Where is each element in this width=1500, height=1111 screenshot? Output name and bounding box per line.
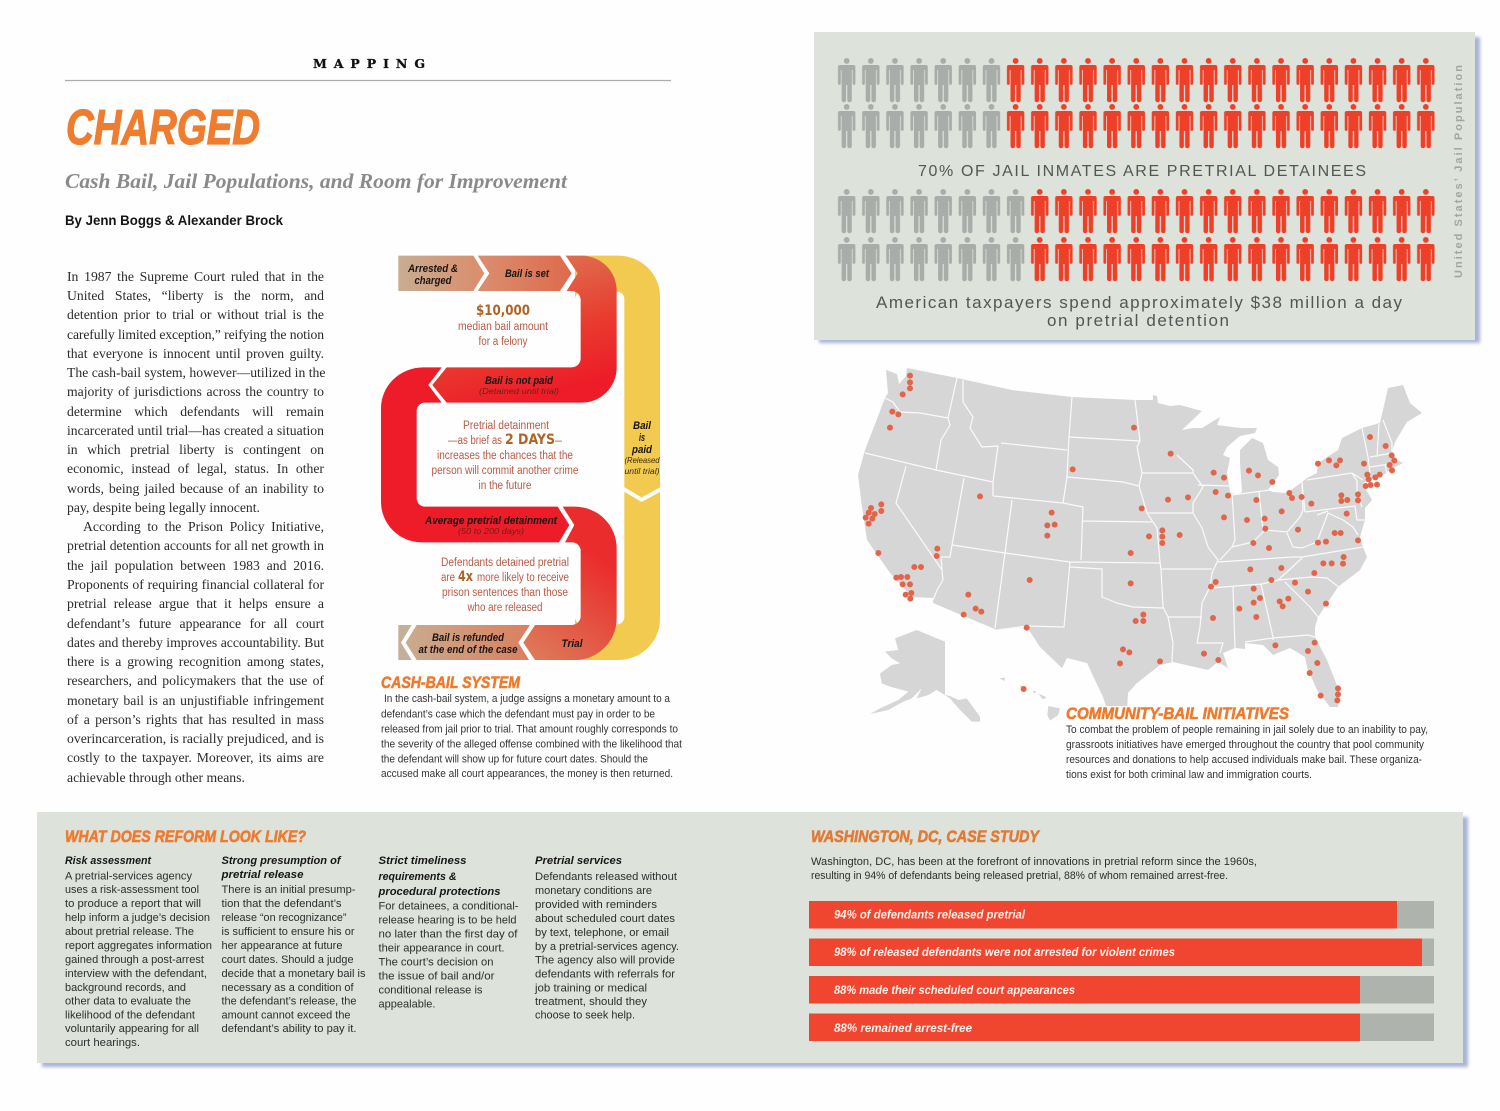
flow label: bail set: Bail is set [505,268,550,280]
body article text: carefully limited exception,” reifying the notion [67,327,324,342]
column: strict timeliness: conditional release is [378,984,483,996]
column: pretrial services [534,855,679,1022]
flow label: bail paid [624,420,660,476]
column: pretrial services: by a pretrial-services agency. [535,941,679,953]
flow label: average detainment: Average pretrial detainment [424,515,558,527]
flow diagram: cash-bail system: 4x [458,569,473,585]
stat: 2 days: Pretrial detainment [463,420,550,432]
initiative dots west [866,376,1160,689]
body article text: economic, instead of legal, status. In other [67,461,324,476]
column: pretrial services: choose to seek help. [535,1010,635,1022]
column: strict timeliness: their appearance in court. [378,942,504,954]
flow diagram: cash-bail system: are [441,572,455,584]
pictogram: row 2 [835,104,1438,150]
community-bail description: tions exist for both criminal law and immigration courts. [1066,769,1312,781]
flow label: arrested: Arrested & [407,263,458,275]
byline: By Jenn Boggs & Alexander Brock [65,212,283,228]
column: pretrial services: treatment, should they [535,996,648,1008]
panel: reform and case study [37,812,1468,1067]
flow diagram: cash-bail system: for a felony [478,336,528,348]
column: risk assessment: interview with the defendant, [65,968,207,980]
column: strong presumption: defendant’s ability to pay it. [222,1023,356,1035]
column: pretrial services: monetary conditions are [535,885,652,897]
column: risk assessment: uses a risk-assessment tool [65,884,199,896]
column: strict timeliness: The court’s decision on [378,956,494,968]
body article text: pretrial detention accounts for all net growth in [67,538,324,553]
body article text: words, being jailed because of an inability to [67,481,324,496]
case study intro: resulting in 94% of defendants being released pretrial, 88% of whom remained arrest-free. [811,870,1228,882]
pictogram: row 4 [835,237,1438,283]
column: risk assessment: to produce a report that will [65,898,201,910]
body article text: The cash-bail system, however—utilized in the [67,365,325,380]
cash-bail description: defendant’s case which the defendant must pay in order to be [381,708,655,720]
column: risk assessment: report aggregates information [65,940,212,952]
body article text: determine which defendants will remain [67,404,324,419]
column: pretrial services: Defendants released without [535,871,677,883]
body article text: According to the Prison Policy Initiative, [83,519,324,534]
Alaska [870,630,980,722]
body article text: there is a growing recognition among states, [67,654,324,669]
pictogram: row 3 [835,189,1438,235]
stat heading: 70%: 70% OF JAIL INMATES ARE PRETRIAL DETAINEES [918,163,1366,180]
stat: $10,000: $10,000 [476,303,530,319]
body article text: In 1987 the Supreme Court ruled that in the [67,269,324,284]
cash-bail description: the defendant will show up for future court dates. Should the [381,754,648,766]
bar: 98% [809,938,1434,966]
case study intro [811,856,1257,882]
stat: 4x: Defendants detained pretrial [441,557,569,569]
flow diagram: cash-bail system: (Detained until trial) [479,386,559,396]
flow diagram: cash-bail system: 2 DAYS [505,432,555,448]
body article text: detention prior to trial or without trial is the [67,307,324,322]
column: strict timeliness [377,855,519,1010]
bar: 88% appearances: 88% made their scheduled court appearances [834,985,1075,997]
mainland US [858,368,1422,712]
column: strong presumption: pretrial release [220,869,304,881]
initiative dots east [1162,437,1394,700]
column: strong presumption [220,855,366,1035]
column: strict timeliness: procedural protections [377,886,500,898]
subtitle: Cash Bail, Jail Populations, and Room for Improvement [65,169,568,193]
bar: 88% arrest-free [809,1014,1434,1041]
flow label: refund: Bail is refunded [432,632,504,644]
body article text: incarcerated until trial—has created a situation [67,423,324,438]
heading: case study: WASHINGTON, DC, CASE STUDY [811,827,1040,846]
column: risk assessment: about pretrial release. The [65,926,194,938]
body article text: United States, “liberty is the norm, and [67,288,324,303]
body article text: defendant’s future appearance for all court [67,616,324,631]
flow label: bail paid: Bail [633,420,652,432]
column: strict timeliness: release hearing is to be held [378,914,516,926]
flow label: bail paid: paid [631,444,652,456]
flow diagram: cash-bail system: —as brief as [448,435,502,447]
column: strong presumption: tion that the defendant’s [222,898,342,910]
column: risk assessment: likelihood of the defendant [65,1010,195,1022]
body article text: dates and thereby improves accountability. But [67,635,324,650]
column: pretrial services: job training or medical [534,982,647,994]
community-bail heading: COMMUNITY-BAIL INITIATIVES [1066,704,1290,723]
body article text: in which pretrial liberty is contingent on [67,442,324,457]
community-bail text block [1062,704,1428,781]
column: pretrial services: provided with reminders [535,899,658,911]
column: pretrial services: Pretrial services [535,855,622,867]
cash-bail description: the severity of the alleged offense combined with the likelihood that [381,738,682,750]
bar: 94% [809,901,1434,928]
bar: 94%: 94% of defendants released pretrial [834,910,1026,922]
flow diagram: cash-bail system: in the future [478,480,532,492]
column: strong presumption: court dates. Should a judge [222,954,354,966]
column: risk assessment: help inform a judge’s decision [65,912,210,924]
column: risk assessment: Risk assessment [65,855,151,867]
body article text: of a person’s rights that has resulted in mass [67,712,324,727]
cash-bail description: In the cash-bail system, a judge assigns a monetary amount to a [384,693,671,705]
column: strict timeliness: For detainees, a conditional- [378,900,519,912]
community-bail description: grassroots initiatives have emerged throughout the country that pool community [1066,739,1424,751]
stat heading: $38 million: American taxpayers spend approximately $38 million a day [876,293,1402,312]
column: pretrial services: about scheduled court dates [535,913,676,925]
body article text: the jail population between 1983 and 2016. [67,558,324,573]
column: strict timeliness: appealable. [378,998,436,1010]
column: risk assessment: court hearings. [65,1037,140,1049]
bar: 88% appearances [809,976,1434,1004]
body article text [67,269,325,785]
community-bail description: To combat the problem of people remaining in jail solely due to an inability to pay, [1066,724,1428,736]
cash-bail description: accused make all court appearances, the money is then returned. [381,768,673,780]
column: strong presumption: Strong presumption of [222,855,342,867]
body article text: Proponents of requiring financial collateral for [67,577,324,592]
column: strict timeliness: no later than the first day of [378,928,519,940]
flow diagram: cash-bail system: (50 to 200 days) [458,526,524,536]
flow diagram: cash-bail system: — [555,435,562,447]
panel: jail population [814,32,1480,343]
flow diagram: cash-bail system [381,256,662,660]
flow diagram: cash-bail system: more likely to receive [477,572,569,584]
flow shapes [381,256,662,660]
flow label: bail paid: is [639,432,645,444]
community-bail description [1066,724,1428,781]
flow label: bail paid: until trial) [624,466,660,476]
bar: 88% arrest-free: 88% remained arrest-free [834,1023,973,1035]
cash-bail heading: CASH-BAIL SYSTEM [381,673,521,692]
column: strong presumption: There is an initial presump- [222,884,356,896]
column: strict timeliness: requirements & [378,871,457,883]
flow diagram: cash-bail system: median bail amount [458,321,549,333]
column: pretrial services: by text, telephone, or email [535,927,669,939]
column: risk assessment [65,855,212,1049]
column: risk assessment: gained through a post-arrest [65,954,204,966]
flow diagram: cash-bail system: increases the chances that the [437,450,573,462]
map: community bail initiatives [858,368,1422,722]
body article text: achievable through other means. [67,770,245,785]
column: risk assessment: other data to evaluate the [65,996,191,1008]
body article text: that everyone is innocent until proven guilty. [67,346,324,361]
column: strong presumption: the defendant’s release, the [222,996,356,1008]
flow label: bail not paid: Bail is not paid [485,375,553,387]
flow diagram: cash-bail system: who are released [467,602,542,614]
title: CHARGED [66,101,260,155]
column: strong presumption: is sufficient to ensure his or [222,926,355,938]
body article text: overincarceration, is racially prejudiced, and is [67,731,324,746]
body article text: researchers, and policymakers that the use of [67,673,324,688]
cash-bail description: released from jail prior to trial. That amount roughly corresponds to [381,724,678,736]
flow label: charged: charged [414,275,452,287]
vertical label: United States’ Jail Population [1453,65,1465,278]
column: strong presumption: necessary as a condition of [222,982,355,994]
section label: MAPPING [313,56,425,71]
body article text: costly to the taxpayer. Moreover, its aims are [67,750,324,765]
flow diagram: cash-bail system: person will commit another crime [432,465,578,477]
pictogram: row 1 [835,58,1438,104]
column: strong presumption: her appearance at future [222,940,342,952]
heading: reform: WHAT DOES REFORM LOOK LIKE? [65,827,307,846]
Hawaii [999,678,1060,721]
body article text: pay, despite being legally innocent. [67,500,260,515]
column: pretrial services: The agency also will provide [535,954,675,966]
bar: 98%: 98% of released defendants were not arrested for violent crimes [834,947,1175,959]
column: strong presumption: decide that a monetary bail is [222,968,366,980]
body article text: pretrial release argue that it helps ensure a [67,596,324,611]
community-bail description: resources and donations to help accused individuals make bail. These organiza- [1066,754,1422,766]
column: strict timeliness: Strict timeliness [378,855,466,867]
column: strict timeliness: the issue of bail and/or [378,970,495,982]
column: strong presumption: release “on recognizance” [222,912,347,924]
case study intro: Washington, DC, has been at the forefront of innovations in pretrial reform since the 1960s, [811,856,1257,868]
column: strong presumption: amount cannot exceed the [222,1010,350,1022]
body article text: monetary bail is an unjustifiable infringement [67,693,324,708]
cash-bail description [381,693,682,780]
panel: jail population: on pretrial detention [1047,311,1229,330]
column: risk assessment: A pretrial-services agency [65,870,193,882]
flow label: trial: Trial [562,638,583,650]
flow label: bail paid: (Released [624,455,660,465]
flow diagram: cash-bail system: prison sentences than those [442,587,568,599]
flow diagram: cash-bail system: at the end of the case [418,644,518,656]
column: risk assessment: background records, and [65,982,186,994]
column: pretrial services: defendants with referrals for [535,968,675,980]
body article text: majority of jurisdictions across the country to [67,384,324,399]
column: risk assessment: voluntarily appearing for all [65,1023,199,1035]
